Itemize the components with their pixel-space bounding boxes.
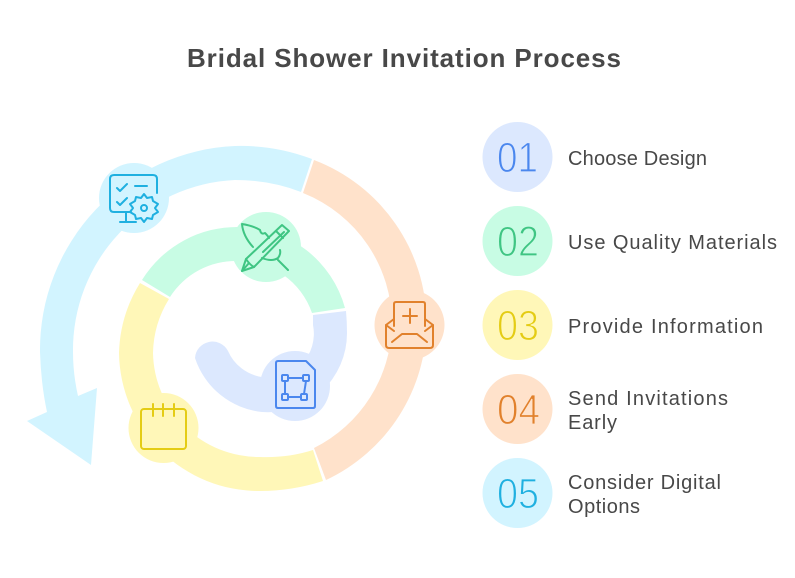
icon: envelope with plus [386, 302, 433, 348]
segment 4: peach arc [303, 160, 444, 480]
legend item 05 [482, 458, 721, 528]
icon: document with shape [276, 361, 315, 408]
legend item 02: Use Quality Materials [568, 232, 777, 254]
legend item 05: Options [568, 496, 640, 518]
legend item 04: 04 [497, 386, 540, 434]
legend item 03: 03 [497, 302, 539, 350]
spiral process diagram [27, 146, 444, 491]
segment 2: green arc [142, 212, 345, 313]
legend item 03 [482, 290, 763, 360]
legend item 03: Provide Information [568, 316, 763, 338]
legend item 01: Choose Design [568, 148, 707, 170]
legend item 04 [482, 374, 728, 444]
icon: monitor with checklist and gear [110, 175, 158, 222]
legend item 04: Send Invitations [568, 388, 728, 410]
icon: pen and feather [242, 224, 289, 271]
segment 5: light blue arrow arc [27, 146, 312, 465]
legend item 02 [482, 206, 777, 276]
legend item 01 [482, 122, 707, 192]
legend item 05: 05 [497, 470, 539, 518]
legend item 01: 01 [497, 134, 538, 182]
legend item 02: 02 [497, 218, 539, 266]
icon: calendar [141, 404, 186, 449]
segment 1: blue arc with round start [195, 311, 347, 421]
legend item 05: Consider Digital [568, 472, 721, 494]
legend item 04: Early [568, 412, 617, 434]
title: Bridal Shower Invitation Process [187, 43, 621, 73]
segment 3: yellow arc [119, 283, 323, 491]
